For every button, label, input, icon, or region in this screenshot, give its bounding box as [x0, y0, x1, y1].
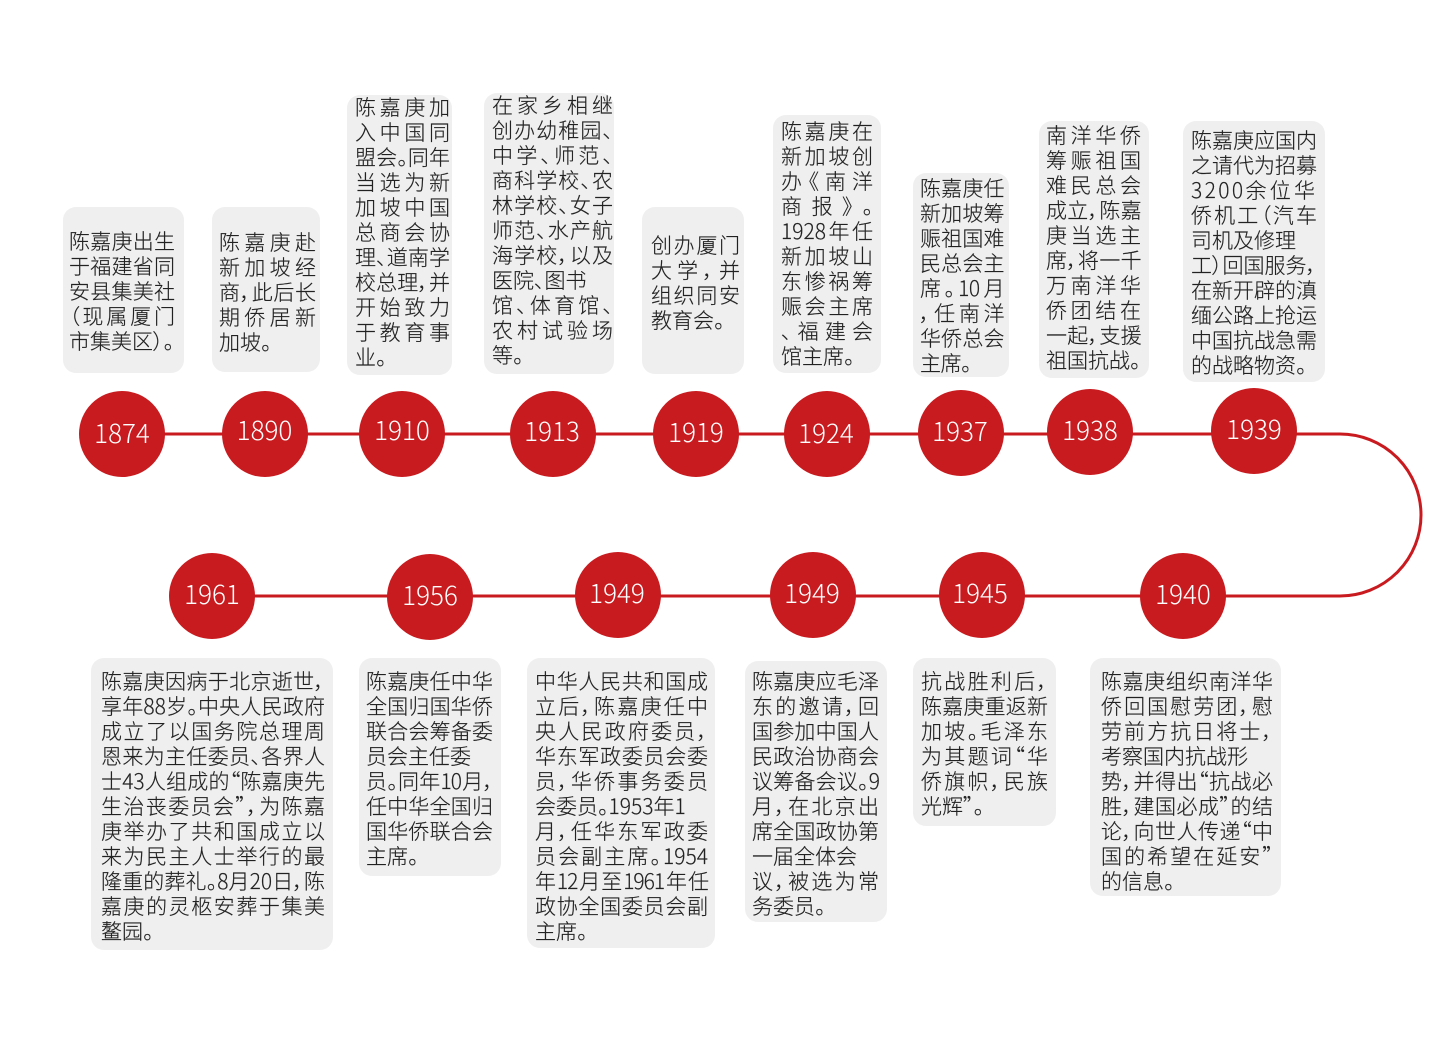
panel: 1949 second event: 民政治协商会 — [752, 741, 879, 771]
panel: 1913 event: 农村试验场 — [492, 315, 613, 345]
panel: 1913 event: 中学、师范、 — [492, 140, 613, 170]
panel: 1949 second event: 议筹备会议。9 — [752, 766, 879, 796]
panel: 1940 event: 的信息。 — [1101, 866, 1174, 896]
panel: 1940 event — [1090, 658, 1281, 896]
marker: 1949 second — [770, 552, 856, 638]
panel: 1938 event: 难民总会 — [1046, 170, 1141, 200]
panel: 1939 event: 中国抗战急需 — [1191, 325, 1317, 355]
panel: 1949 first event: 年12月至1961年任 — [535, 866, 708, 896]
panel: 1956 event: 国华侨联合会 — [366, 816, 493, 846]
panel: 1961 event: 恩来为主任委员、各界人 — [101, 741, 325, 771]
panel: 1890 event: 新加坡经 — [219, 252, 316, 282]
panel: 1940 event: 胜，建国必成”的结 — [1101, 791, 1273, 821]
panel: 1919 event: 大学，并 — [651, 255, 740, 285]
panel: 1945 event: 为其题词“华 — [921, 741, 1048, 771]
marker: 1913 — [510, 391, 596, 477]
marker: 1919: 1919 — [668, 413, 724, 450]
panel: 1949 second event: 月，在北京出 — [752, 791, 879, 821]
panel: 1913 event: 林学校、女子 — [492, 190, 613, 220]
panel: 1949 first event: 政协全国委员会副 — [535, 891, 708, 921]
marker: 1874: 1874 — [94, 414, 150, 451]
panel: 1940 event: 论，向世人传递“中 — [1101, 816, 1273, 846]
marker: 1939: 1939 — [1226, 410, 1282, 447]
panel: 1939 event: 3200余位华 — [1191, 175, 1318, 205]
marker: 1945 — [939, 552, 1025, 638]
panel: 1945 event: 陈嘉庚重返新 — [921, 691, 1048, 721]
panel: 1938 event: 南洋华侨 — [1046, 120, 1141, 150]
panel: 1910 event — [347, 95, 452, 375]
panel: 1874 event: 陈嘉庚出生 — [69, 226, 175, 256]
panel: 1949 first event: 员会副主席。1954 — [535, 841, 708, 871]
panel: 1956 event: 全国归国华侨 — [366, 691, 493, 721]
panel: 1919 event: 创办厦门 — [651, 230, 740, 260]
panel: 1874 event: 市集美区）。 — [69, 326, 174, 356]
panel: 1938 event: 席，将一千 — [1046, 245, 1141, 275]
panel: 1949 first event: 主席。 — [535, 916, 588, 946]
panel: 1938 event: 成立，陈嘉 — [1046, 195, 1141, 225]
panel: 1919 event: 组织同安 — [651, 280, 740, 310]
panel: 1961 event: 陈嘉庚因病于北京逝世， — [101, 666, 325, 696]
marker: 1945: 1945 — [952, 574, 1008, 611]
marker: 1890: 1890 — [237, 411, 292, 448]
marker: 1949 second: 1949 — [784, 574, 840, 611]
panel: 1938 event: 侨团结在 — [1046, 295, 1141, 325]
panel: 1924 event: 馆主席。 — [781, 341, 854, 371]
panel: 1961 event: 成立了以国务院总理周 — [101, 716, 325, 746]
panel: 1939 event: 的战略物资。 — [1191, 350, 1306, 380]
panel: 1937 event: 赈祖国难 — [920, 223, 1004, 253]
marker: 1956 — [387, 554, 473, 640]
panel: 1874 event: （现属厦门 — [69, 301, 175, 331]
panel: 1956 event: 员会主任委 — [366, 741, 471, 771]
marker: 1937 — [918, 390, 1004, 476]
panel: 1949 second event: 陈嘉庚应毛泽 — [752, 666, 879, 696]
marker: 1910: 1910 — [374, 411, 430, 448]
panel: 1937 event — [913, 173, 1009, 377]
panel: 1940 event: 考察国内抗战形 — [1101, 741, 1248, 771]
panel: 1956 event: 主席。 — [366, 841, 418, 871]
marker: 1924 — [784, 391, 870, 477]
panel: 1937 event: ，任南洋 — [920, 298, 1004, 328]
panel: 1956 event: 员。同年10月， — [366, 766, 493, 796]
panel: 1961 event: 隆重的葬礼。8月20日，陈 — [101, 866, 325, 896]
panel: 1924 event: 赈会主席 — [781, 291, 873, 321]
panel: 1937 event: 席。10月 — [920, 273, 1004, 303]
panel: 1949 first event: 立后，陈嘉庚任中 — [535, 691, 708, 721]
panel: 1939 event: 司机及修理 — [1191, 225, 1296, 255]
panel: 1910 event: 开始致力 — [355, 292, 450, 322]
panel: 1939 event: 工）回国服务， — [1191, 250, 1317, 280]
panel: 1949 second event: 国参加中国人 — [752, 716, 879, 746]
panel: 1910 event: 业。 — [355, 342, 386, 372]
panel: 1919 event — [642, 207, 744, 374]
marker: 1949 first: 1949 — [589, 574, 645, 611]
panel: 1956 event: 陈嘉庚任中华 — [366, 666, 493, 696]
panel: 1924 event: 办《南洋 — [781, 166, 873, 196]
panel: 1937 event: 新加坡筹 — [920, 198, 1004, 228]
panel: 1910 event: 校总理，并 — [355, 267, 450, 297]
panel: 1940 event: 劳前方抗日将士， — [1101, 716, 1273, 746]
panel: 1938 event: 一起，支援 — [1046, 320, 1141, 350]
panel: 1913 event: 海学校，以及 — [492, 240, 613, 270]
panel: 1937 event: 陈嘉庚任 — [920, 173, 1004, 203]
panel: 1913 event: 医院、图书 — [492, 265, 586, 295]
panel: 1890 event: 期侨居新 — [219, 302, 316, 332]
panel: 1913 event: 创办幼稚园、 — [492, 115, 613, 145]
marker: 1874 — [79, 391, 165, 477]
marker: 1919 — [653, 391, 739, 477]
panel: 1949 second event: 一届全体会 — [752, 841, 857, 871]
panel: 1924 event — [773, 115, 881, 373]
panel: 1874 event: 于福建省同 — [69, 251, 175, 281]
panel: 1913 event — [484, 93, 614, 374]
panel: 1937 event: 华侨总会 — [920, 323, 1004, 353]
panel: 1924 event: 新加坡山 — [781, 241, 873, 271]
panel: 1874 event: 安县集美社 — [69, 276, 175, 306]
marker: 1910 — [359, 391, 445, 477]
panel: 1919 event: 教育会。 — [651, 305, 724, 335]
panel: 1956 event — [359, 658, 501, 876]
panel: 1961 event: 庚举办了共和国成立以 — [101, 816, 325, 846]
panel: 1961 event: 士43人组成的“陈嘉庚先 — [101, 766, 325, 796]
panel: 1939 event: 侨机工（汽车 — [1191, 200, 1317, 230]
marker: 1938 — [1047, 389, 1133, 475]
panel: 1939 event — [1183, 121, 1325, 382]
panel: 1910 event: 理、道南学 — [355, 242, 450, 272]
panel: 1910 event: 陈嘉庚加 — [355, 92, 450, 122]
panel: 1961 event: 享年88岁。中央人民政府 — [101, 691, 325, 721]
panel: 1910 event: 当选为新 — [355, 167, 450, 197]
marker: 1956: 1956 — [402, 576, 458, 613]
panel: 1938 event: 筹赈祖国 — [1046, 145, 1141, 175]
timeline path — [122, 434, 1421, 596]
panel: 1961 event: 鳌园。 — [101, 916, 154, 946]
panel: 1961 event: 嘉庚的灵柩安葬于集美 — [101, 891, 325, 921]
panel: 1924 event: 新加坡创 — [781, 141, 873, 171]
panel: 1949 first event: 华东军政委员会委 — [535, 741, 708, 771]
panel: 1910 event: 总商会协 — [355, 217, 450, 247]
panel: 1890 event: 陈嘉庚赴 — [219, 227, 316, 257]
marker: 1913: 1913 — [524, 412, 580, 449]
panel: 1949 first event: 中华人民共和国成 — [535, 666, 708, 696]
panel: 1890 event: 商，此后长 — [219, 277, 316, 307]
panel: 1945 event: 侨旗帜，民族 — [921, 766, 1048, 796]
marker: 1938: 1938 — [1062, 411, 1118, 448]
panel: 1913 event: 商科学校、农 — [492, 165, 613, 195]
panel: 1924 event: 、福建会 — [781, 316, 873, 346]
panel: 1924 event: 东惨祸筹 — [781, 266, 873, 296]
marker: 1940: 1940 — [1155, 575, 1211, 612]
panel: 1949 second event: 务委员。 — [752, 891, 826, 921]
panel: 1961 event: 来为民主人士举行的最 — [101, 841, 325, 871]
panel: 1924 event: 商报》。 — [781, 191, 873, 221]
panel: 1939 event: 在新开辟的滇 — [1191, 275, 1317, 305]
panel: 1939 event: 缅公路上抢运 — [1191, 300, 1317, 330]
marker: 1961 — [169, 553, 255, 639]
panel: 1949 first event — [527, 658, 715, 948]
marker: 1939 — [1211, 388, 1297, 474]
panel: 1949 second event: 东的邀请，回 — [752, 691, 879, 721]
panel: 1913 event: 在家乡相继 — [492, 90, 613, 120]
panel: 1940 event: 陈嘉庚组织南洋华 — [1101, 666, 1273, 696]
panel: 1910 event: 于教育事 — [355, 317, 450, 347]
panel: 1939 event: 之请代为招募 — [1191, 150, 1317, 180]
panel: 1937 event: 主席。 — [920, 348, 971, 378]
panel: 1913 event: 师范、水产航 — [492, 215, 613, 245]
panel: 1938 event — [1039, 121, 1149, 378]
panel: 1945 event: 光辉”。 — [921, 791, 984, 821]
marker: 1890 — [222, 391, 308, 477]
panel: 1956 event: 任中华全国归 — [366, 791, 493, 821]
panel: 1956 event: 联合会筹备委 — [366, 716, 493, 746]
panel: 1949 first event: 央人民政府委员， — [535, 716, 708, 746]
panel: 1961 event — [91, 658, 333, 950]
panel: 1940 event: 势，并得出“抗战必 — [1101, 766, 1273, 796]
panel: 1924 event: 陈嘉庚在 — [781, 116, 873, 146]
marker: 1940 — [1140, 553, 1226, 639]
panel: 1945 event — [913, 658, 1056, 826]
panel: 1949 second event: 议，被选为常 — [752, 866, 879, 896]
marker: 1961: 1961 — [184, 575, 240, 612]
panel: 1945 event: 抗战胜利后， — [921, 666, 1048, 696]
panel: 1938 event: 祖国抗战。 — [1046, 345, 1140, 375]
panel: 1913 event: 馆、体育馆、 — [492, 290, 613, 320]
panel: 1910 event: 加坡中国 — [355, 192, 450, 222]
panel: 1890 event: 加坡。 — [219, 327, 272, 357]
panel: 1938 event: 庚当选主 — [1046, 220, 1141, 250]
marker: 1949 first — [575, 552, 661, 638]
panel: 1949 second event — [745, 661, 887, 922]
panel: 1924 event: 1928年任 — [781, 216, 873, 246]
panel: 1890 event — [212, 207, 320, 372]
panel: 1949 first event: 会委员。1953年1 — [535, 791, 686, 821]
panel: 1939 event: 陈嘉庚应国内 — [1191, 125, 1317, 155]
panel: 1949 second event: 席全国政协第 — [752, 816, 879, 846]
marker: 1937: 1937 — [932, 412, 988, 449]
marker: 1924: 1924 — [798, 414, 854, 451]
panel: 1910 event: 盟会。同年 — [355, 142, 450, 172]
panel: 1945 event: 加坡。毛泽东 — [921, 716, 1048, 746]
panel: 1910 event: 入中国同 — [355, 117, 450, 147]
panel: 1949 first event: 月，任华东军政委 — [535, 816, 708, 846]
panel: 1937 event: 民总会主 — [920, 248, 1004, 278]
panel: 1938 event: 万南洋华 — [1046, 270, 1141, 300]
panel: 1940 event: 国的希望在延安” — [1101, 841, 1273, 871]
panel: 1961 event: 生治丧委员会”，为陈嘉 — [101, 791, 325, 821]
panel: 1940 event: 侨回国慰劳团，慰 — [1101, 691, 1273, 721]
panel: 1949 first event: 员，华侨事务委员 — [535, 766, 708, 796]
panel: 1874 event — [63, 207, 184, 373]
panel: 1913 event: 等。 — [492, 340, 524, 370]
